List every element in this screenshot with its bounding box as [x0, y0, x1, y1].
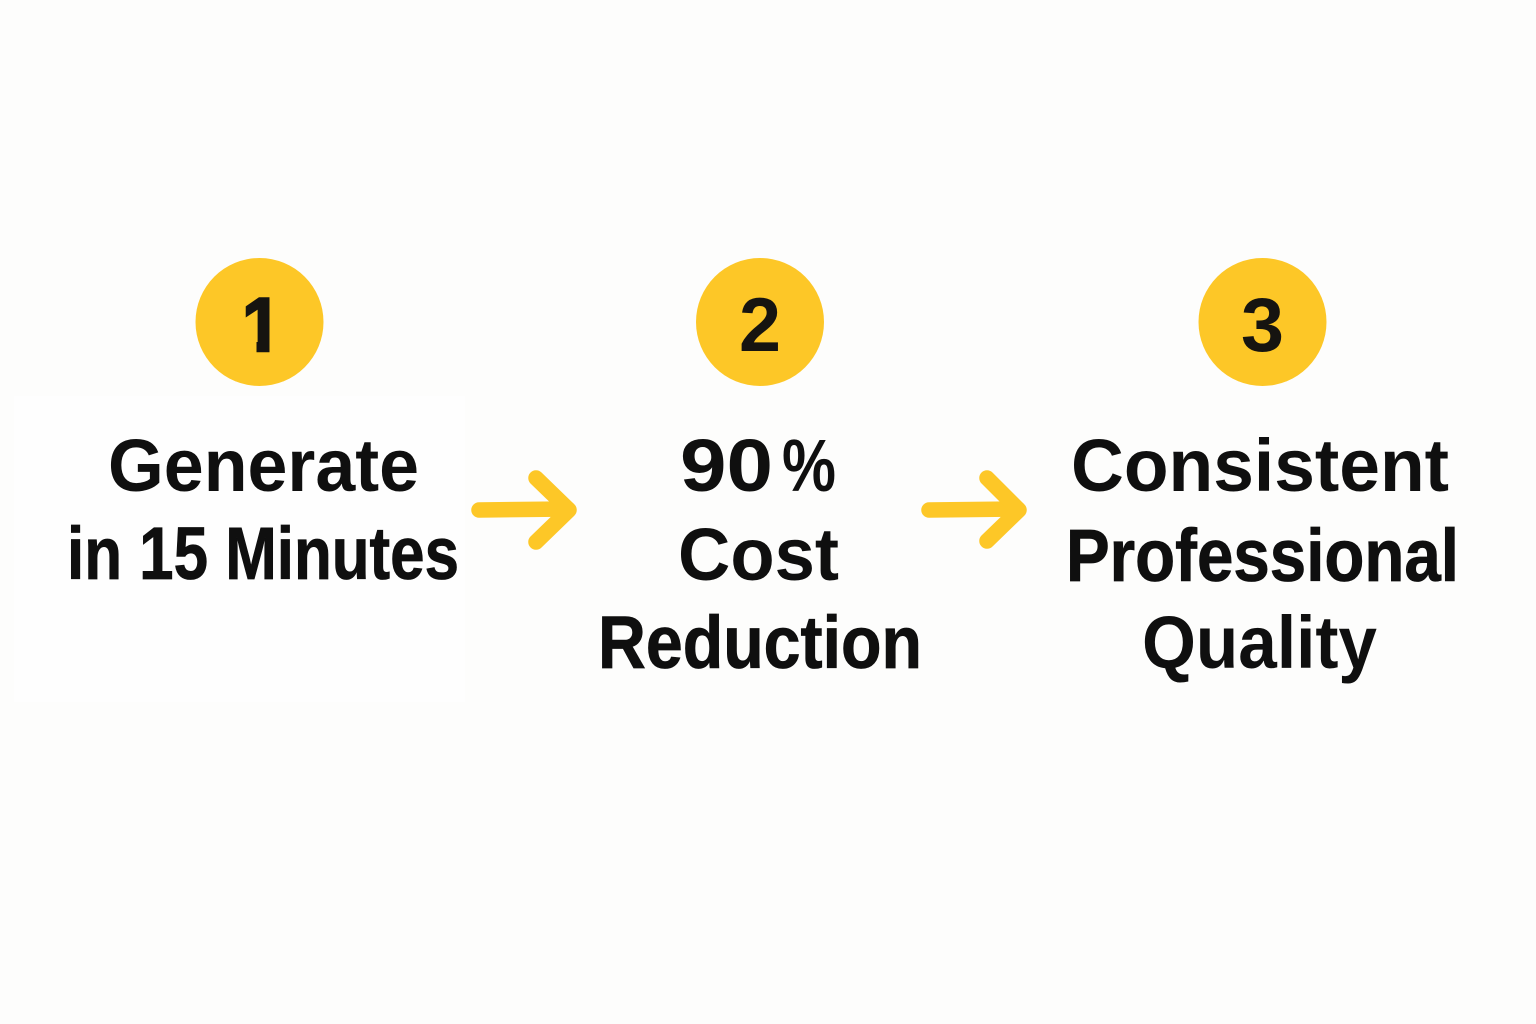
step 3 label — [1066, 424, 1459, 684]
step 2 label: 90 — [680, 424, 773, 507]
step 2 number badge — [696, 258, 824, 386]
step 2 label: % — [782, 424, 836, 507]
step 3 number badge — [1198, 258, 1326, 386]
step 3 label: Quality — [1142, 601, 1377, 684]
step 2 number badge: 2 — [739, 283, 781, 368]
step 3 label: Professional — [1066, 514, 1459, 597]
step 1 label: Generate — [108, 424, 419, 507]
step 1 label: in 15 Minutes — [67, 512, 459, 595]
arrow: step 1 to step 2 — [479, 478, 569, 542]
step 2 — [598, 258, 922, 684]
step 1 label — [67, 424, 459, 595]
step 2 label: Reduction — [598, 601, 922, 684]
step 3 — [1066, 258, 1459, 684]
arrow: step 2 to step 3 — [929, 478, 1019, 541]
step 3 number badge: 3 — [1241, 283, 1284, 368]
step 3 label: Consistent — [1071, 424, 1449, 507]
step 1 number badge — [196, 258, 324, 386]
step 2 label: Cost — [678, 513, 839, 596]
step 1 number badge: 1 — [242, 283, 282, 368]
infographic: three step process — [71, 258, 1455, 684]
step 2 label — [598, 424, 922, 684]
step 1 — [67, 258, 459, 595]
